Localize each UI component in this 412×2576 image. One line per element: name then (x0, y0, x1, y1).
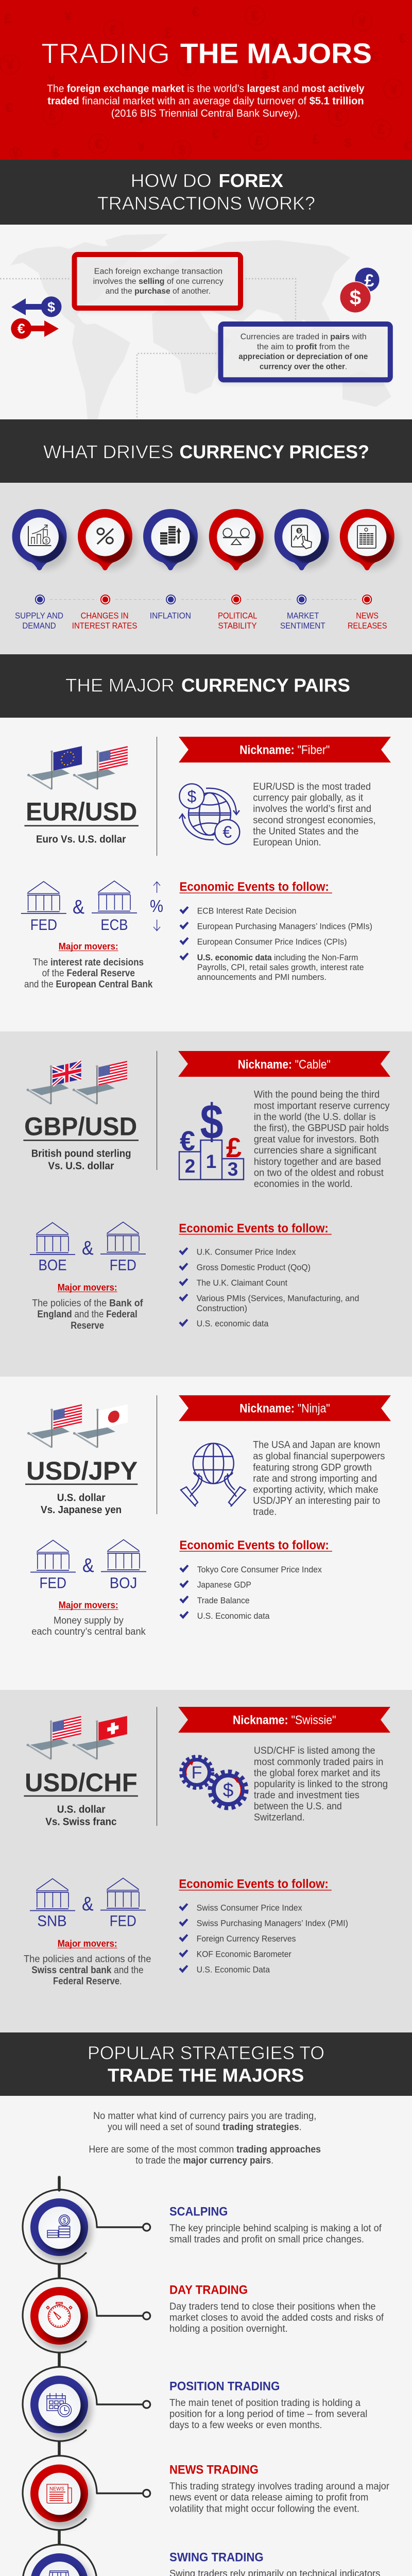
major movers: each country’s central bank (31, 1626, 146, 1637)
pair name: GBP/USD (24, 1112, 137, 1141)
icon: tablet with hand: $ (298, 529, 301, 534)
currency symbol pattern: ¥ (138, 139, 145, 155)
icon: currency podium: 1 (206, 1151, 216, 1172)
pair name: British pound sterling (31, 1148, 131, 1159)
title: THE MAJORS (180, 37, 372, 69)
strategy: position trading: days to a few weeks or even months. (169, 2420, 322, 2431)
major movers: The policies of the Bank of (32, 1298, 143, 1309)
callout: selling and purchase (74, 255, 242, 311)
callout: currency pairs: appreciation or depreciation of one (238, 352, 368, 361)
economic events list: U.S. Economic data (197, 1612, 270, 1621)
driver labels: SENTIMENT (280, 621, 325, 631)
icon: currency podium: $ (200, 1094, 224, 1149)
major movers: Major movers: (58, 1282, 117, 1293)
central banks: SNB and FED: FED (110, 1912, 136, 1929)
economic events list: Various PMIs (Services, Manufacturing, and (197, 1294, 359, 1303)
icon: selling dollar arrow (11, 296, 62, 317)
central banks: BOE and FED (30, 1222, 146, 1274)
title: TRADING (41, 37, 170, 69)
economic events list (179, 880, 372, 982)
economic events list: U.K. Consumer Price Index (197, 1247, 296, 1257)
panel: popular strategies heading: TRADE THE MAJORS (108, 2065, 304, 2086)
driver labels: INTEREST RATES (72, 621, 137, 631)
description: in the world (the U.S. dollar is (254, 1112, 376, 1123)
pair name (23, 1112, 139, 1172)
driver: inflation (143, 509, 202, 570)
currency symbol pattern: £ (4, 11, 12, 26)
currency symbol pattern: £ (165, 25, 173, 41)
economic events list: European Consumer Price Indices (CPIs) (197, 938, 347, 947)
description: popularity is linked to the strong (254, 1779, 388, 1790)
nickname ribbon (178, 1051, 390, 1077)
central banks: FED and BOJ (30, 1539, 146, 1592)
economic events list: Construction) (197, 1304, 247, 1313)
strategies intro: Here are some of the most common trading approaches (89, 2144, 321, 2155)
strategy: news trading: NEWS TRADING (169, 2463, 259, 2477)
strategy: scalping (23, 2190, 382, 2264)
panel: what drives currency prices heading: CURRENCY PRICES? (179, 442, 369, 463)
driver labels: CHANGES IN (81, 611, 129, 621)
description: history together and are based (254, 1157, 381, 1167)
icon: rate up and down: % (150, 896, 163, 916)
pair name: USD/CHF (25, 1768, 138, 1797)
strategy: day trading: holding a position overnight. (169, 2324, 288, 2334)
major movers: Major movers: (59, 1599, 118, 1611)
panel: what drives currency prices heading (0, 419, 412, 483)
pair name: USD/JPY (26, 1456, 138, 1485)
currency symbol pattern: € (110, 22, 117, 38)
driver labels: STABILITY (218, 621, 256, 631)
strategies intro (89, 2111, 321, 2166)
strategy: news trading: This trading strategy involves trading around a major (169, 2481, 390, 2492)
driver labels: POLITICAL (218, 611, 258, 621)
panel: major currency pairs heading: THE MAJOR (65, 674, 175, 696)
currency symbol pattern: ¥ (138, 111, 146, 126)
icon: currency gears (181, 1757, 246, 1808)
strategy: day trading: DAY TRADING (169, 2283, 248, 2297)
panel: forex transactions map (0, 225, 412, 419)
currency symbol pattern: $ (178, 142, 186, 158)
pair name: Vs. Japanese yen (41, 1504, 122, 1516)
icon: swing set (47, 2571, 71, 2576)
panel: how do forex transactions work heading: TRANSACTIONS WORK? (97, 193, 315, 214)
callout: selling and purchase: and the purchase of another. (106, 287, 211, 296)
strategy: day trading: Day traders tend to close their positions when the (169, 2301, 376, 2312)
pair name: Euro Vs. U.S. dollar (36, 834, 126, 845)
pair name (24, 1768, 138, 1828)
driver labels: NEWS (356, 611, 379, 621)
currency symbol pattern: € (399, 30, 406, 46)
icon: currency podium: € (180, 1126, 195, 1157)
economic events list (179, 1538, 332, 1621)
central banks: BOE and FED: & (82, 1238, 94, 1259)
economic events list (179, 1222, 359, 1329)
intro text: The foreign exchange market is the world’s largest and most actively (47, 83, 365, 95)
strategy: position trading: position for a long period of time – from several (169, 2409, 367, 2420)
currency symbol pattern: ¥ (6, 57, 14, 72)
icon: coin stacks with arrow (160, 526, 181, 545)
economic events list: Economic Events to follow: (179, 1538, 329, 1552)
icon: rate up and down (150, 882, 163, 930)
central banks: FED and BOJ: BOJ (110, 1574, 137, 1592)
icon: calendar and clock (47, 2393, 71, 2417)
strategy: position trading (23, 2367, 367, 2441)
strategy: position trading: POSITION TRADING (169, 2379, 280, 2393)
central banks: FED and BOJ: FED (39, 1574, 66, 1592)
major movers: Reserve (71, 1320, 104, 1331)
description: USD/CHF is listed among the (254, 1745, 375, 1756)
economic events list: Gross Domestic Product (QoQ) (197, 1263, 311, 1273)
callout: currency pairs: currency over the other. (260, 362, 347, 371)
strategy: scalping: small trades and profit on small price changes. (169, 2234, 364, 2245)
pair name: U.S. dollar (57, 1804, 106, 1816)
central banks: SNB and FED: SNB (37, 1912, 67, 1929)
currency symbol pattern: € (335, 109, 342, 124)
economic events list: Payrolls, CPI, retail sales growth, interest rate (197, 963, 364, 972)
icon: newspaper: NEWS (49, 2486, 64, 2492)
central banks: SNB and FED: & (82, 1893, 94, 1915)
callout: selling and purchase: Each foreign exchange transaction (94, 267, 222, 276)
icon: document (357, 526, 376, 548)
currency symbol pattern: £ (377, 122, 385, 137)
description: second strongest economies, (253, 815, 376, 826)
driver: supply and demand (12, 509, 71, 570)
icon: currency coins (339, 268, 379, 313)
driver: interest rates (78, 509, 137, 570)
panel: how do forex transactions work heading (0, 160, 412, 225)
currency symbol pattern: $ (52, 145, 60, 161)
description: currency pair globally, as it (253, 793, 364, 804)
strategies intro: you will need a set of sound trading strategies. (108, 2122, 302, 2133)
panel: how do forex transactions work heading: HOW DO (131, 170, 212, 191)
major movers: Major movers: (58, 1938, 117, 1949)
strategy: scalping: SCALPING (169, 2205, 228, 2219)
strategies intro: No matter what kind of currency pairs you are trading, (93, 2111, 316, 2122)
pair name: EUR/USD (26, 798, 137, 826)
economic events list (179, 1877, 348, 1974)
panel: popular strategies heading: POPULAR STRATEGIES TO (88, 2042, 324, 2063)
pair name (24, 798, 139, 845)
economic events list: Swiss Consumer Price Index (197, 1903, 302, 1912)
icon: currency podium: £ (226, 1132, 242, 1163)
description: the United States and the (253, 826, 358, 837)
currency symbol pattern: € (6, 100, 13, 115)
description: on two of the oldest and robust (254, 1167, 384, 1178)
central banks: SNB and FED (30, 1878, 146, 1929)
currency symbol pattern: £ (313, 131, 320, 147)
economic events list: Economic Events to follow: (179, 1877, 329, 1891)
driver labels: MARKET (287, 611, 319, 621)
currency symbol pattern: ¥ (12, 145, 20, 161)
panel: how do forex transactions work heading: FOREX (218, 170, 283, 191)
strategy: news trading: news event or data release aiming to profit from (169, 2493, 368, 2503)
driver labels: RELEASES (348, 621, 387, 631)
pair name: Vs. Swiss franc (45, 1817, 116, 1828)
driver: news releases (340, 509, 399, 570)
strategy: day trading (23, 2278, 384, 2352)
description: USD/JPY an interesting pair to (253, 1496, 380, 1506)
panel: strategies (0, 2096, 412, 2576)
economic events list: Economic Events to follow: (179, 880, 329, 894)
central banks: FED and ECB: ECB (100, 917, 128, 934)
description: EUR/USD is the most traded (253, 782, 371, 792)
currency symbol pattern: £ (255, 133, 263, 148)
icon: percent (97, 529, 113, 544)
central banks: FED and BOJ: & (82, 1555, 94, 1577)
nickname ribbon: Nickname: "Ninja" (239, 1401, 330, 1416)
strategy: news trading: volatility that might occur following the event. (169, 2503, 359, 2514)
currency symbol pattern: € (251, 8, 259, 23)
currency symbol pattern: € (95, 136, 102, 151)
intro text: (2016 BIS Triennial Central Bank Survey). (111, 107, 300, 120)
economic events list: The U.K. Claimant Count (197, 1278, 287, 1287)
icon: globe with currency exchange: € (222, 823, 232, 841)
driver labels (15, 611, 387, 631)
nickname ribbon (178, 1707, 390, 1733)
icon: currency gears: F (192, 1763, 202, 1783)
economic events list: Foreign Currency Reserves (197, 1935, 296, 1944)
icon: buying euro arrow (11, 318, 59, 339)
world map (10, 234, 391, 419)
callout: currency pairs (219, 324, 390, 383)
description: trade. (253, 1506, 277, 1518)
callout: currency pairs: the aim to profit from the (257, 343, 350, 351)
currency symbol pattern: ¥ (48, 73, 56, 88)
panel: EUR/USD (0, 718, 412, 1031)
currency symbol pattern: € (404, 138, 411, 154)
icon: currency podium: 2 (185, 1156, 195, 1177)
strategy: swing trading (23, 2545, 380, 2576)
currency symbol pattern: ¥ (271, 35, 279, 50)
nickname ribbon: Nickname: "Cable" (238, 1058, 331, 1072)
economic events list: Swiss Purchasing Managers’ Index (PMI) (197, 1919, 348, 1928)
central banks: FED and ECB: & (73, 896, 84, 918)
currency symbol pattern: ¥ (390, 81, 398, 97)
major movers (31, 1599, 146, 1637)
description: economies in the world. (254, 1179, 353, 1190)
icon: currency podium: 3 (228, 1159, 238, 1180)
description: Switzerland. (254, 1812, 305, 1823)
description: the first), the GBPUSD pair holds (254, 1123, 389, 1134)
economic events list: European Purchasing Managers’ Indices (PMIs) (197, 922, 372, 931)
nickname ribbon (179, 737, 391, 762)
strategy: news trading (23, 2456, 390, 2530)
economic events list: ECB Interest Rate Decision (197, 907, 297, 916)
description: between the U.S. and (254, 1801, 342, 1812)
strategy: position trading: The main tenet of position trading is holding a (169, 2398, 360, 2409)
central banks: BOE and FED: FED (110, 1257, 136, 1274)
panel: major currency pairs heading: CURRENCY PAIRS (181, 674, 350, 696)
nickname ribbon: Nickname: "Swissie" (233, 1714, 336, 1727)
flags: US and Japan (27, 1404, 128, 1448)
major movers: of the Federal Reserve (42, 968, 135, 979)
currency symbol pattern: £ (49, 107, 57, 123)
economic events list: announcements and PMI numbers. (197, 973, 327, 982)
dotted connectors (0, 279, 296, 419)
panel: currency price drivers (0, 483, 412, 654)
icon: coins: $ (63, 2217, 66, 2224)
description: involves the world’s first and (253, 804, 371, 815)
description: The USA and Japan are known (253, 1440, 380, 1451)
icon: currency coins: £ (365, 271, 374, 291)
currency symbol pattern: $ (344, 135, 352, 150)
major movers: Money supply by (54, 1615, 124, 1626)
currency symbol pattern: £ (371, 49, 379, 64)
flags: US and Switzerland (27, 1716, 127, 1759)
panel: GBP/USD (0, 1031, 412, 1377)
nickname ribbon: Nickname: "Fiber" (239, 743, 330, 757)
strategy: scalping: The key principle behind scalping is making a lot of (169, 2223, 382, 2234)
major movers: England and the Federal (37, 1309, 138, 1320)
strategy: day trading: market closes to avoid the added costs and risks of (169, 2312, 384, 2324)
description (253, 782, 376, 848)
icon: globe with currency exchange (179, 784, 239, 844)
description (254, 1745, 388, 1823)
currency symbol pattern: $ (261, 67, 269, 82)
panel: USD/CHF (0, 1690, 412, 2032)
panel: major currency pairs heading (0, 654, 412, 718)
major movers: The interest rate decisions (33, 957, 144, 968)
icon: currency gears: $ (223, 1780, 233, 1801)
panel: header (0, 0, 412, 161)
icon: currency podium (179, 1094, 244, 1180)
economic events list: Japanese GDP (197, 1581, 251, 1590)
icon: hands holding globe (181, 1444, 246, 1506)
driver labels: SUPPLY AND (15, 611, 63, 621)
currency symbol pattern: ¥ (358, 13, 366, 29)
icon: buying euro arrow: € (18, 321, 25, 336)
icon: newspaper (47, 2484, 72, 2503)
description (253, 1440, 385, 1518)
description: great value for investors. Both (254, 1134, 379, 1145)
intro text: traded financial market with an average daily turnover of $5.1 trillion (47, 95, 364, 107)
driver: market sentiment (274, 509, 334, 570)
currency symbol pattern: € (192, 4, 199, 20)
driver labels: INFLATION (150, 611, 191, 621)
major movers: Swiss central bank and the (31, 1965, 144, 1976)
description: trade and investment ties (254, 1790, 359, 1801)
currency symbol pattern (0, 4, 411, 161)
panel: what drives currency prices heading: WHAT DRIVES (43, 442, 174, 463)
strategy: swing trading: SWING TRADING (169, 2550, 264, 2565)
description: European Union. (253, 837, 321, 848)
major movers: The policies and actions of the (24, 1954, 151, 1965)
description: rate and strong importing and (253, 1473, 377, 1484)
nickname ribbon (179, 1395, 391, 1421)
driver labels: DEMAND (22, 621, 56, 631)
icon: balance (223, 529, 249, 545)
description: the global forex market and its (254, 1768, 380, 1778)
economic events list: U.S. economic data (197, 1319, 269, 1329)
economic events list: Trade Balance (197, 1596, 250, 1605)
strategies intro: to trade the major currency pairs. (135, 2156, 273, 2166)
economic events list: KOF Economic Barometer (197, 1950, 291, 1959)
major movers: and the European Central Bank (24, 979, 153, 990)
callout: selling and purchase: involves the selling of one currency (93, 277, 224, 286)
description (254, 1090, 390, 1190)
currency symbol pattern: € (212, 126, 219, 142)
major movers (24, 941, 153, 990)
pair name: Vs. U.S. dollar (48, 1160, 114, 1172)
economic events list: Tokyo Core Consumer Price Index (197, 1565, 322, 1574)
description: as global financial superpowers (253, 1451, 385, 1462)
description: most important reserve currency (254, 1101, 390, 1112)
title (41, 37, 372, 69)
economic events list: Economic Events to follow: (179, 1222, 329, 1235)
description: most commonly traded pairs in (254, 1757, 383, 1768)
major movers (24, 1938, 151, 1987)
timeline spine (58, 2177, 61, 2576)
icon: currency coins: $ (350, 286, 361, 309)
central banks: FED and ECB (21, 881, 163, 934)
icon: chart with coin: $ (45, 538, 48, 544)
driver: political stability (209, 509, 268, 570)
central banks: FED and ECB: FED (30, 917, 57, 934)
description: featuring strong GDP growth (253, 1462, 372, 1473)
economic events list: U.S. Economic Data (197, 1965, 270, 1974)
panel: USD/JPY (0, 1377, 412, 1690)
description: With the pound being the third (254, 1090, 380, 1100)
major movers (32, 1282, 143, 1331)
flags: EU and US (27, 746, 128, 789)
economic events list: U.S. economic data including the Non-Farm (197, 953, 358, 962)
panel: popular strategies heading (0, 2032, 412, 2096)
icon: coins (47, 2215, 70, 2238)
pair name (25, 1456, 138, 1516)
major movers: Major movers: (59, 941, 118, 952)
timeline markers (36, 595, 371, 604)
pair name: U.S. dollar (57, 1492, 106, 1503)
intro text (47, 83, 365, 120)
description: exporting activity, which make (253, 1485, 379, 1496)
callout: currency pairs: Currencies are traded in pairs with (241, 333, 367, 342)
major movers: Federal Reserve. (53, 1976, 122, 1987)
icon: selling dollar arrow: $ (47, 299, 55, 315)
flags: UK and US (27, 1061, 127, 1104)
currency symbol pattern: ¥ (64, 8, 72, 24)
description: currencies share a significant (254, 1145, 377, 1156)
currency symbol pattern: ¥ (183, 58, 191, 74)
icon: stopwatch (46, 2302, 72, 2328)
central banks: BOE and FED: BOE (38, 1257, 67, 1274)
icon: globe with currency exchange: $ (187, 787, 197, 806)
